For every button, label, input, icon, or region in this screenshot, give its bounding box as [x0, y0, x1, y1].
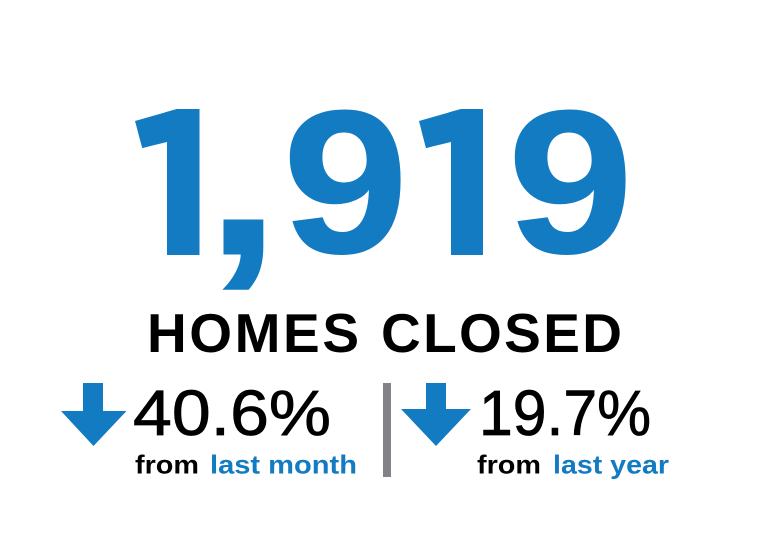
caption: from last month: [135, 450, 357, 480]
heading: homes closed: [147, 302, 622, 364]
word: from: from: [477, 450, 541, 480]
word: closed: CLOSED: [381, 302, 622, 364]
caption: from last year: [477, 450, 669, 480]
comma: ,: [205, 48, 281, 303]
word: homes: HOMES: [147, 302, 359, 364]
words: last year: last year: [553, 450, 669, 480]
digit: last 9: 9: [508, 68, 633, 296]
stat: month change: 40.6%: [133, 377, 331, 449]
word: from: from: [135, 450, 199, 480]
digit: first 9: 9: [282, 68, 408, 296]
stat: year change: 19.7%: [479, 377, 651, 449]
icon: down arrow month: [61, 383, 126, 446]
icon: down arrow year: [401, 383, 471, 446]
words: last month: last month: [210, 450, 357, 480]
big number: homes closed: [135, 109, 626, 290]
divider: [383, 383, 391, 477]
digit: first 1: 1: [119, 63, 237, 300]
digit: second 1: 1: [403, 63, 521, 300]
